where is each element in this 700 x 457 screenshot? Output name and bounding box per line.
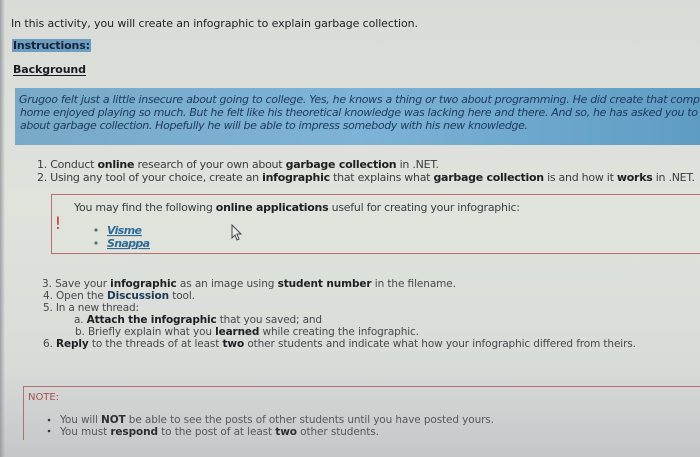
icon: exclamation mark: ! [54, 214, 61, 234]
steps 1 and 2 [37, 158, 695, 184]
heading: background: Background [13, 63, 86, 76]
steps 3 to 6: b. Briefly explain what you learned while creating the infographic. [75, 326, 419, 338]
note label: NOTE: [28, 392, 59, 403]
callout text: You may find the following online applications useful for creating your infographic: [73, 201, 520, 214]
panel: background story [15, 88, 700, 145]
note list [48, 414, 494, 438]
list of applications [94, 224, 150, 250]
steps 3 to 6: 3. Save your infographic as an image using student number in the filename. [42, 278, 456, 290]
panel: online applications callout [52, 194, 700, 254]
steps 3 to 6: 6. Reply to the threads of at least two other students and indicate what how your infographic differed from theirs. [43, 338, 636, 350]
steps 1 and 2: 1. Conduct online research of your own about garbage collection in .NET. [37, 158, 439, 171]
panel: background story: home enjoyed playing so much. But he felt like his theoretical knowledge was lacking here and there. And so, he has asked you to [20, 106, 698, 119]
note list: You will NOT be able to see the posts of other students until you have posted yours. [59, 414, 494, 426]
list of applications: Snappa [107, 237, 150, 250]
steps 3 to 6: 5. In a new thread: [43, 302, 139, 314]
steps 1 and 2: 2. Using any tool of your choice, create an infographic that explains what garbage collection is and how it works in .NET. [37, 171, 695, 184]
steps 3 to 6: 4. Open the Discussion tool. [43, 290, 195, 302]
heading: instructions: Instructions: [13, 39, 90, 52]
steps 3 to 6 [42, 278, 636, 350]
intro sentence: In this activity, you will create an infographic to explain garbage collection. [11, 17, 418, 30]
list of applications: Visme [107, 224, 143, 237]
panel: background story: about garbage collection. Hopefully he will be able to impress somebody with his new knowledge. [20, 119, 528, 132]
note list: You must respond to the post of at least two other students. [59, 426, 379, 438]
panel: note [24, 386, 700, 440]
icon: mouse cursor [232, 225, 241, 240]
steps 3 to 6: a. Attach the infographic that you saved; and [74, 314, 322, 326]
panel: background story: Grugoo felt just a little insecure about going to college. Yes, he knows a thing or two about programming. He did create that comp [19, 93, 700, 106]
